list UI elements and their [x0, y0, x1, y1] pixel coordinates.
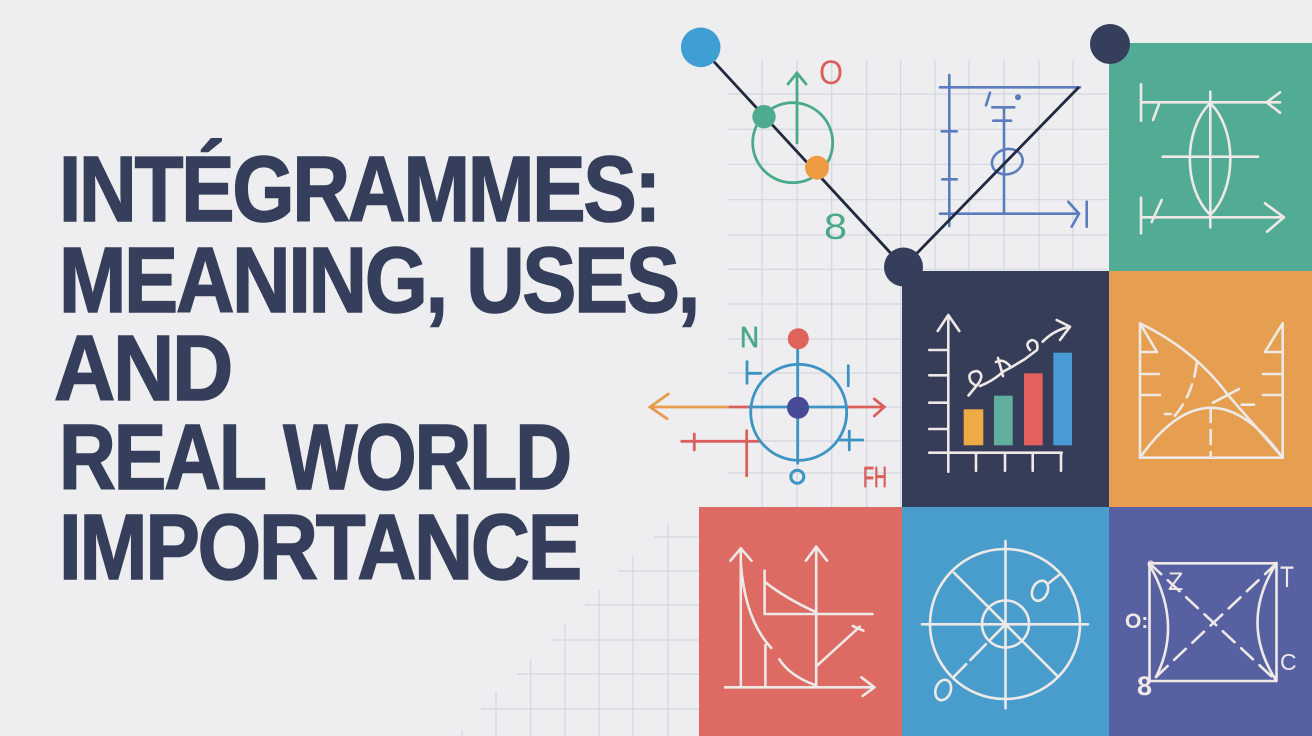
- chart axes and trend arrow: [929, 315, 1070, 472]
- panel: purple square diagram: T: [1280, 561, 1294, 594]
- bar chart bars: [964, 353, 1072, 445]
- diagram: compass target: [650, 322, 887, 494]
- node: dark top right: [1090, 24, 1130, 64]
- panel: green lens diagram: [1109, 43, 1312, 271]
- panel: blue circle diagram: [902, 507, 1109, 736]
- title: MEANING, USES,: [59, 228, 698, 332]
- diagram: blue axes with tick marks: [940, 75, 1087, 227]
- diagram: green circle with arrow: [753, 54, 847, 247]
- title: [54, 137, 698, 599]
- connector lines and nodes: [681, 24, 1130, 286]
- panel: purple square diagram: Z: [1168, 568, 1183, 596]
- label: z: 8: [824, 206, 847, 247]
- title: AND: [54, 316, 231, 420]
- label: O: O: [819, 54, 843, 92]
- title: INTÉGRAMMES:: [59, 137, 659, 241]
- node: dark junction: [884, 248, 923, 286]
- panel: red function graph: [699, 507, 902, 736]
- panel: dark bar chart: [902, 271, 1109, 507]
- node: orange: [805, 156, 829, 180]
- panel: purple square diagram: [1109, 507, 1312, 736]
- panel: purple square diagram: C: [1280, 649, 1297, 675]
- panel: purple square diagram: c: [1147, 555, 1154, 571]
- panel: purple square diagram: 8: [1137, 671, 1152, 701]
- title: IMPORTANCE: [59, 495, 580, 599]
- panel: purple square diagram: O:: [1125, 610, 1148, 633]
- label: FH: FH: [863, 462, 887, 494]
- node: green: [752, 105, 776, 128]
- title: REAL WORLD: [59, 405, 570, 509]
- node: blue: [681, 28, 720, 67]
- label: N: N: [740, 322, 759, 354]
- panel: orange geometry diagram: [1109, 271, 1312, 507]
